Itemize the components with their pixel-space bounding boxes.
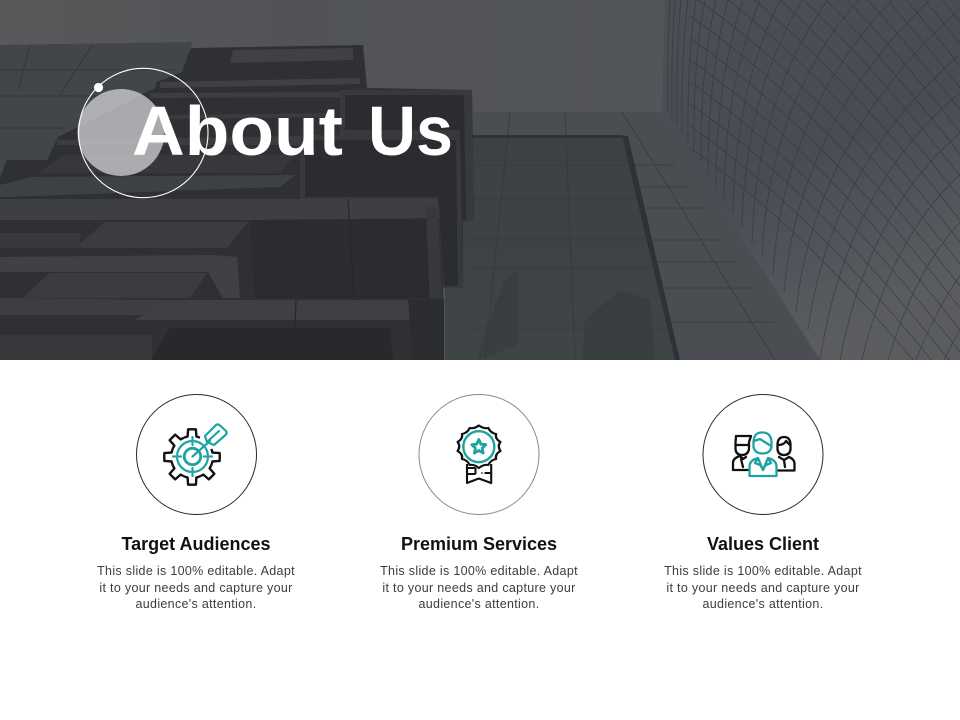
- description: audience's attention.: [136, 597, 256, 611]
- title with decorative circles: [78, 68, 453, 198]
- description: it to your needs and capture your: [99, 580, 293, 594]
- heading: Target Audiences: [121, 534, 271, 554]
- title text: [132, 92, 453, 170]
- decorative ring: [79, 68, 208, 198]
- heading: Premium Services: [401, 534, 557, 554]
- description: This slide is 100% editable. Adapt: [664, 564, 862, 578]
- decorative filled circle: [78, 89, 164, 176]
- icon: award badge: [418, 394, 540, 515]
- panel: target audiences: [97, 394, 295, 611]
- description: [380, 564, 578, 611]
- description: it to your needs and capture your: [382, 580, 576, 594]
- description: This slide is 100% editable. Adapt: [380, 564, 578, 578]
- description: it to your needs and capture your: [666, 580, 860, 594]
- title text: Us: [368, 92, 453, 170]
- icon: team of three people: [702, 394, 824, 515]
- glass facade and concrete strip: [445, 112, 820, 360]
- heading: Values Client: [707, 534, 819, 554]
- panel: values client: [664, 394, 862, 611]
- description: This slide is 100% editable. Adapt: [97, 564, 295, 578]
- left building: [0, 45, 474, 360]
- panel: premium services: [380, 394, 578, 611]
- stepped dark blocks: [340, 90, 474, 222]
- description: [664, 564, 862, 611]
- description: [97, 564, 295, 611]
- title text: About: [132, 92, 343, 170]
- decorative dot: [94, 83, 103, 92]
- description: audience's attention.: [418, 597, 540, 611]
- description: audience's attention.: [702, 597, 824, 611]
- icon: target with gear: [136, 394, 257, 515]
- hero photo: building background: [0, 0, 960, 360]
- curved glass tower: [662, 0, 960, 360]
